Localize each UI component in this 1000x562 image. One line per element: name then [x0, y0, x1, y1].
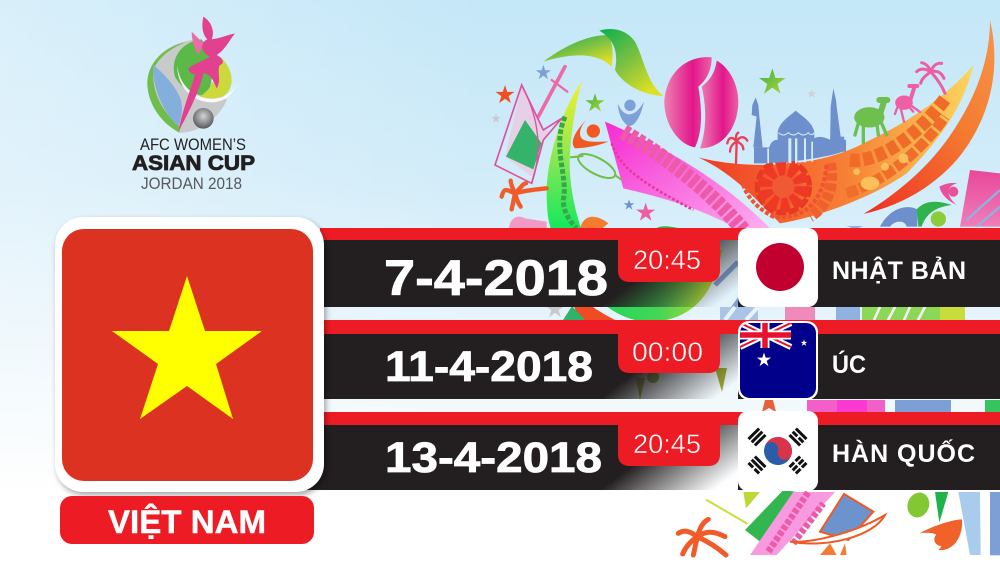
white card [55, 217, 324, 492]
orange figure, bottom [919, 519, 962, 550]
black bar [300, 240, 1000, 307]
team name: HÀN QUỐC [832, 438, 975, 468]
decorative artwork: bottom [678, 489, 1000, 555]
red top strip [320, 320, 1000, 334]
green drop and blade, bottom [904, 489, 948, 523]
panel: Vietnam flag card [55, 217, 324, 492]
lower right figures [847, 170, 1000, 229]
coloured fragments, row one gap [720, 307, 965, 320]
blue bands, bottom [958, 492, 1000, 555]
time pill: 20:45 [633, 245, 701, 275]
green sail [547, 82, 582, 230]
schedule row 2 [300, 320, 1000, 400]
icon: orange figure [573, 120, 608, 148]
time pill: 00:00 [632, 337, 703, 367]
time pill [618, 332, 720, 373]
green dome behind row one [565, 245, 722, 322]
coloured fragments, row two gap [636, 368, 1000, 412]
red top strip [320, 412, 1000, 425]
orange crescent [863, 20, 994, 214]
icon: red palm [727, 133, 747, 163]
icon: pink camel [895, 86, 920, 122]
green leaf [543, 29, 663, 96]
sail boat, bottom [790, 494, 885, 555]
label: Vietnam: VIỆT NAM [108, 504, 266, 540]
icon: green camel [854, 100, 887, 143]
icon: leaf outline [570, 149, 622, 183]
icon: pink palm [508, 217, 547, 230]
date: 13-4-2018 [385, 434, 602, 482]
label: Vietnam [60, 496, 314, 544]
time pill: 20:45 [633, 429, 701, 459]
logo emblem [147, 17, 237, 133]
logo text: JORDAN 2018: JORDAN 2018 [141, 175, 242, 193]
icon: sword [538, 67, 567, 117]
icon: orange palm [502, 181, 547, 209]
red top strip [320, 228, 1000, 240]
schedule row 3 [300, 411, 1000, 491]
magenta patterned wing [605, 122, 772, 230]
AFC Women's Asian Cup logo [132, 17, 255, 193]
logo text: ASIAN CUP: ASIAN CUP [132, 152, 255, 175]
black bar [300, 334, 1000, 399]
icon: orange fragment [580, 217, 608, 230]
icon: flag of Australia [738, 321, 818, 400]
pink coffee bean [664, 57, 738, 148]
time pill [618, 423, 720, 466]
icon: flag of South Korea [738, 411, 818, 491]
mosque silhouette [752, 88, 846, 163]
icon: flag of Vietnam [62, 229, 313, 481]
blue strokes row one gap [715, 262, 760, 320]
team name: ÚC [832, 349, 866, 379]
date: 11-4-2018 [385, 343, 593, 391]
icon: flag of Japan [738, 228, 818, 307]
date: 7-4-2018 [384, 250, 608, 306]
logo text: AFC WOMEN'S: AFC WOMEN’S [140, 136, 246, 154]
schedule row 1 [300, 228, 1000, 307]
icon: pink palm tree [917, 63, 945, 93]
icon: blue figure [618, 100, 644, 126]
time pill [618, 238, 720, 282]
mosque details [767, 133, 814, 163]
icon: green fragment [656, 226, 680, 228]
pink band, bottom [750, 492, 835, 555]
green mosque, bottom [707, 490, 797, 542]
decorative artwork: upper right [491, 20, 1000, 230]
artwork visible through the gaps between rows [545, 245, 1000, 412]
icon: orange palm, bottom [678, 519, 726, 555]
team name: NHẬT BẢN [832, 255, 966, 285]
patterned red and orange boat [698, 65, 973, 223]
stars [491, 65, 816, 221]
icon: tent boat [495, 85, 562, 183]
black bar [300, 425, 1000, 490]
